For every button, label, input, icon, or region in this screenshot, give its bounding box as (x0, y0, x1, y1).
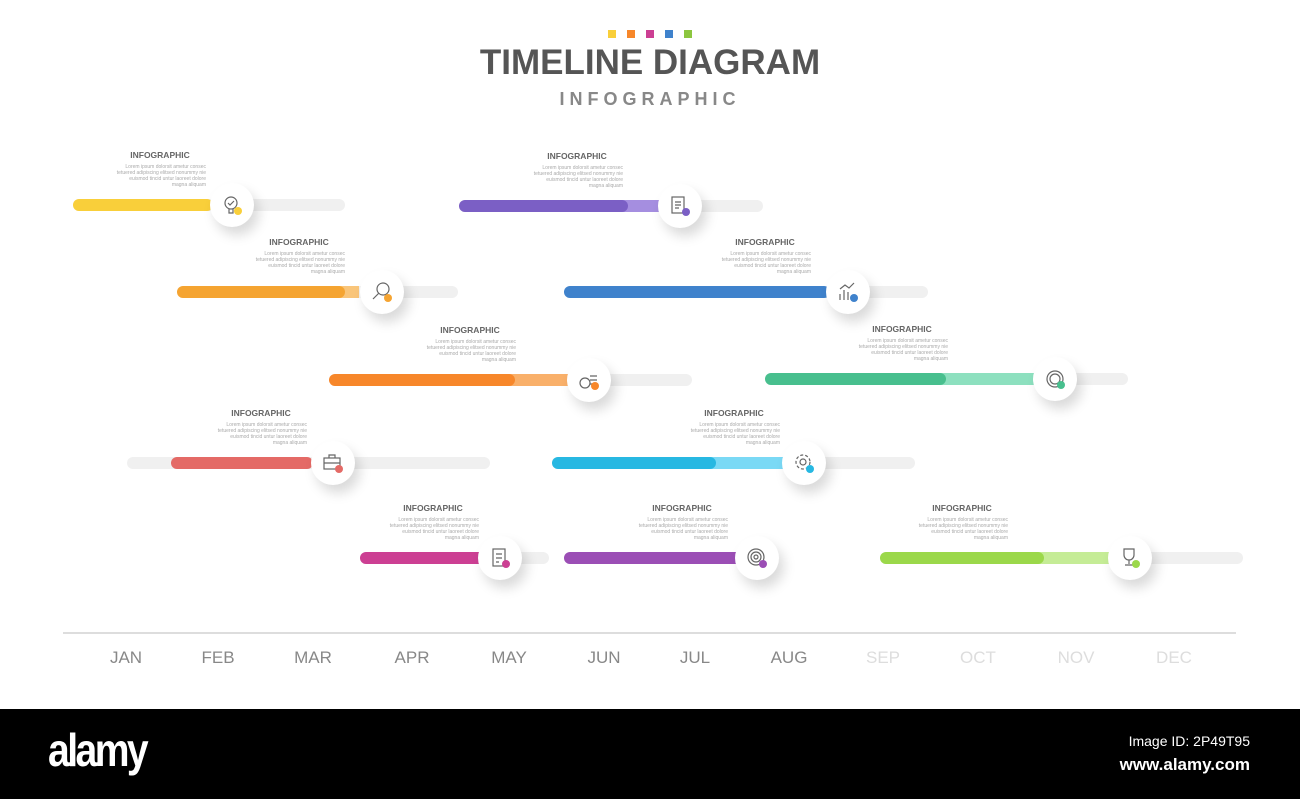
icon: chart (826, 270, 870, 314)
icon: dollar coin (1033, 357, 1077, 401)
icon: trophy (1108, 536, 1152, 580)
icon: checklist (478, 536, 522, 580)
task 7: red: INFOGRAPHIC (231, 408, 291, 418)
subtitle: INFOGRAPHIC (560, 89, 740, 109)
task 2: purple: INFOGRAPHIC (547, 151, 607, 161)
month labels: JUL (680, 648, 710, 667)
month labels: OCT (960, 648, 996, 667)
task 5: orange (329, 325, 692, 414)
icon: briefcase (311, 441, 355, 485)
month labels: AUG (771, 648, 807, 667)
task 10: violet: Lorem ipsum dolorsit ametur consec tetuered adipiscing elitsed nonummy nie euismod tincid untur laoreet dolore magna aliquam (639, 517, 728, 541)
task 6: green (765, 324, 1128, 412)
icon: lightbulb (210, 183, 254, 227)
logo: alamy (48, 724, 146, 776)
image id: Image ID: 2P49T95 (1129, 733, 1250, 749)
month labels: MAR (294, 648, 332, 667)
month labels: DEC (1156, 648, 1192, 667)
task 8: cyan (552, 408, 915, 496)
task 9: magenta: INFOGRAPHIC (403, 503, 463, 513)
month labels: MAY (491, 648, 527, 667)
month labels: APR (395, 648, 429, 667)
task 7: red: Lorem ipsum dolorsit ametur consec tetuered adipiscing elitsed nonummy nie euismod tincid untur laoreet dolore magna aliquam (218, 422, 307, 446)
task 5: orange: INFOGRAPHIC (440, 325, 500, 335)
month labels: SEP (866, 648, 900, 667)
task 1: yellow: Lorem ipsum dolorsit ametur consec tetuered adipiscing elitsed nonummy nie euismod tincid untur laoreet dolore magna aliquam (117, 164, 206, 188)
task 5: orange: Lorem ipsum dolorsit ametur consec tetuered adipiscing elitsed nonummy nie euismod tincid untur laoreet dolore magna aliquam (427, 339, 516, 363)
task 9: magenta: Lorem ipsum dolorsit ametur consec tetuered adipiscing elitsed nonummy nie euismod tincid untur laoreet dolore magna aliquam (390, 517, 479, 541)
footer bar (0, 709, 1300, 799)
task 8: cyan: INFOGRAPHIC (704, 408, 764, 418)
task 11: lime: INFOGRAPHIC (932, 503, 992, 513)
month labels: NOV (1058, 648, 1094, 667)
title: TIMELINE DIAGRAM (480, 43, 820, 82)
task 4: blue: Lorem ipsum dolorsit ametur consec tetuered adipiscing elitsed nonummy nie euismod tincid untur laoreet dolore magna aliquam (722, 251, 811, 275)
task 3: amber: INFOGRAPHIC (269, 237, 329, 247)
task 6: green: INFOGRAPHIC (872, 324, 932, 334)
icon: coins (567, 358, 611, 402)
task 8: cyan: Lorem ipsum dolorsit ametur consec tetuered adipiscing elitsed nonummy nie euismod tincid untur laoreet dolore magna aliquam (691, 422, 780, 446)
task 10: violet: INFOGRAPHIC (652, 503, 712, 513)
task 1: yellow: INFOGRAPHIC (130, 150, 190, 160)
color dots (608, 30, 692, 38)
task 11: lime: Lorem ipsum dolorsit ametur consec tetuered adipiscing elitsed nonummy nie euismod tincid untur laoreet dolore magna aliquam (919, 517, 1008, 541)
task 4: blue: INFOGRAPHIC (735, 237, 795, 247)
footer bar: www.alamy.com (1120, 755, 1250, 774)
task 2: purple: Lorem ipsum dolorsit ametur consec tetuered adipiscing elitsed nonummy nie euismod tincid untur laoreet dolore magna aliquam (534, 165, 623, 189)
icon: magnifier (360, 270, 404, 314)
task 10: violet (564, 503, 788, 592)
month labels: JUN (587, 648, 621, 667)
task 11: lime (880, 503, 1243, 592)
task 1: yellow (73, 150, 345, 238)
task 4: blue (564, 237, 928, 326)
month labels: FEB (201, 648, 235, 667)
task 3: amber: Lorem ipsum dolorsit ametur consec tetuered adipiscing elitsed nonummy nie euismod tincid untur laoreet dolore magna aliquam (256, 251, 345, 275)
icon: target (735, 536, 779, 580)
task 6: green: Lorem ipsum dolorsit ametur consec tetuered adipiscing elitsed nonummy nie euismod tincid untur laoreet dolore magna aliquam (859, 338, 948, 362)
month labels: JAN (110, 648, 142, 667)
task 7: red (127, 408, 490, 496)
icon: document (658, 184, 702, 228)
task 9: magenta (360, 503, 549, 592)
task 2: purple (459, 151, 763, 240)
axis line (63, 632, 1236, 634)
icon: gear (782, 441, 826, 485)
task 3: amber (177, 237, 458, 326)
